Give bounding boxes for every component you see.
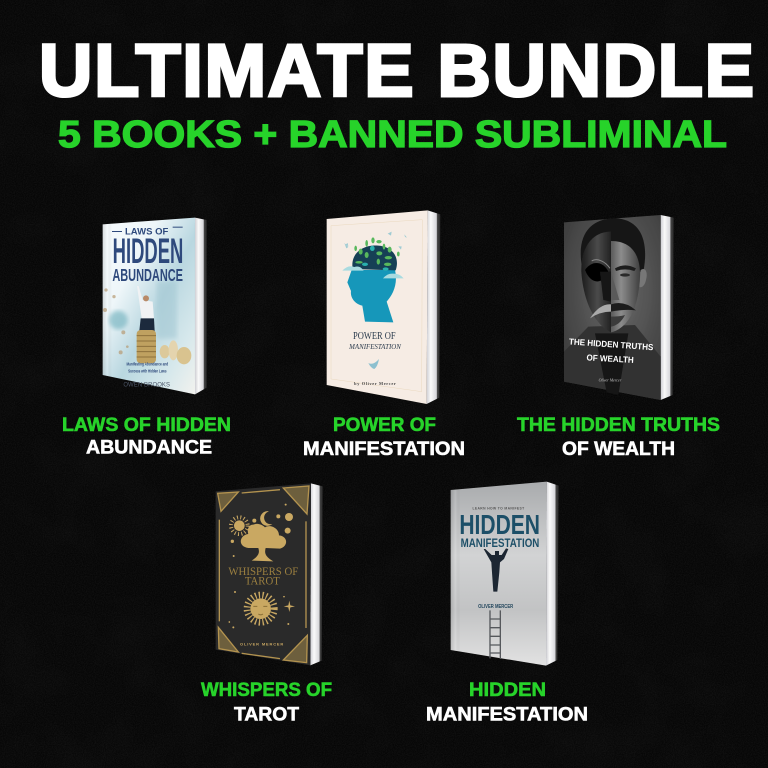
label: Whispers of Tarot: TAROT [234, 704, 299, 726]
book: Hidden Manifestation [451, 482, 559, 666]
book: Hidden Manifestation: OLIVER MERCER [478, 604, 513, 610]
label: Laws of Hidden Abundance: LAWS OF HIDDEN [62, 415, 231, 436]
book: Power of Manifestation: MANIFESTATION [348, 342, 402, 351]
label: Power of Manifestation: MANIFESTATION [303, 439, 465, 460]
book: The Hidden Truths of Wealth [564, 215, 674, 400]
book: Hidden Manifestation: LEARN HOW TO MANIFEST [472, 506, 524, 510]
book: Laws of Hidden Abundance: ABUNDANCE [112, 265, 183, 285]
book: Whispers of Tarot: TAROT [245, 576, 280, 588]
book: Power of Manifestation [327, 210, 440, 404]
book: Laws of Hidden Abundance: OWEN BROOKS [123, 383, 170, 389]
book: Laws of Hidden Abundance: HIDDEN [113, 232, 183, 271]
book: Hidden Manifestation: MANIFESTATION [461, 536, 539, 550]
label: The Hidden Truths of Wealth: THE HIDDEN TRUTHS [517, 415, 720, 436]
label: Power of Manifestation: POWER OF [333, 415, 436, 436]
subtitle: 5 BOOKS + BANNED SUBLIMINAL [58, 114, 727, 156]
label: Whispers of Tarot: WHISPERS OF [201, 680, 332, 701]
book: The Hidden Truths of Wealth: THE HIDDEN TRUTHS [569, 336, 654, 352]
book: Whispers of Tarot [216, 483, 323, 665]
label: Laws of Hidden Abundance: ABUNDANCE [86, 438, 212, 458]
label: Hidden Manifestation: MANIFESTATION [426, 704, 588, 726]
label: The Hidden Truths of Wealth: OF WEALTH [562, 439, 675, 460]
label: The Hidden Truths of Wealth [517, 415, 720, 460]
book: Hidden Manifestation: HIDDEN [459, 509, 540, 540]
book: The Hidden Truths of Wealth: OF WEALTH [586, 352, 634, 365]
title: ULTIMATE BUNDLE [39, 29, 754, 112]
book: Laws of Hidden Abundance: LAWS OF [125, 226, 169, 236]
label: Hidden Manifestation [426, 680, 588, 726]
label: Laws of Hidden Abundance [62, 415, 231, 458]
label: Power of Manifestation [303, 415, 465, 460]
book: Whispers of Tarot: WHISPERS OF [228, 566, 298, 578]
book: Laws of Hidden Abundance [103, 218, 207, 394]
book: Power of Manifestation: by Oliver Mercer [354, 381, 396, 386]
book: The Hidden Truths of Wealth: Oliver Mercer [599, 377, 622, 382]
book: Laws of Hidden Abundance: Manifesting Abundance and [126, 362, 168, 367]
book: Power of Manifestation: POWER OF [353, 331, 396, 342]
label: Hidden Manifestation: HIDDEN [469, 680, 546, 701]
book: Laws of Hidden Abundance: Success with Hidden Laws [128, 368, 167, 373]
book: Whispers of Tarot: OLIVER MERCER [240, 641, 283, 646]
label: Whispers of Tarot [201, 680, 332, 726]
